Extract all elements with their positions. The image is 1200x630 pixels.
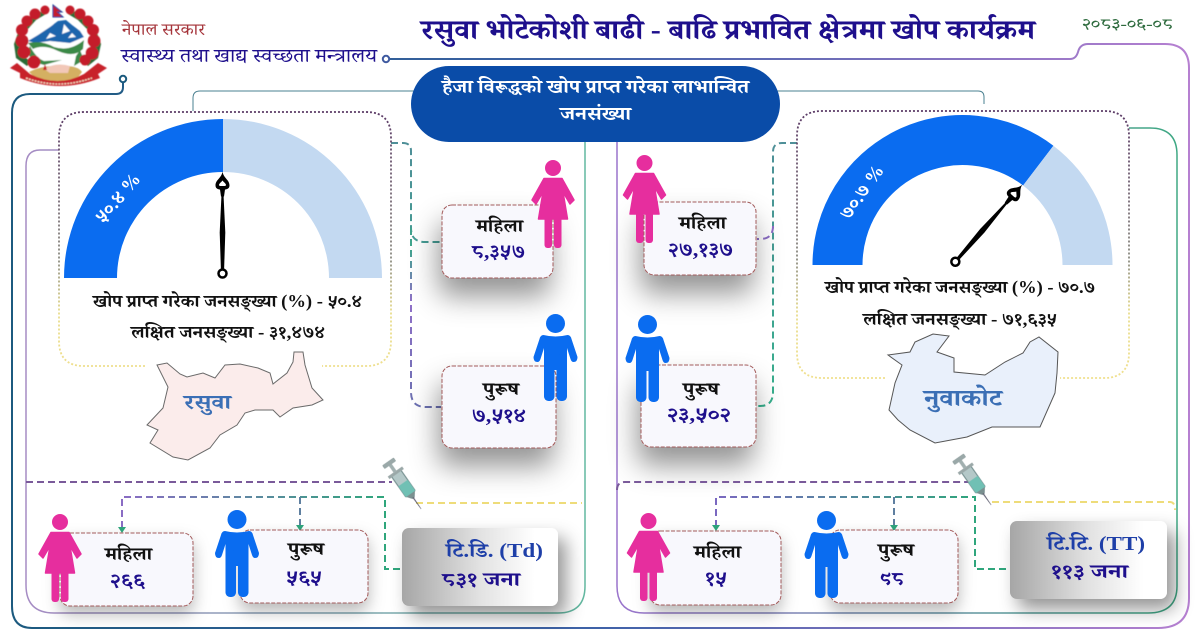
heading pill [411,66,780,142]
card: Rasuwa female: महिला [474,216,524,236]
card: Td male: पुरूष [286,539,325,561]
map: Rasuwa [147,352,323,460]
icon: female [532,160,574,248]
date: २०८३-०६-०८ [1082,16,1173,33]
card: TT male: ९८ [880,568,904,590]
icon: male [626,315,670,402]
divider: Rasuwa vaccine dashes [26,482,582,569]
card: Nuwakot male: पुरूष [681,379,720,401]
icon: female [39,514,81,602]
card: TT male [804,511,958,603]
connector: right gauge to cards [757,143,797,406]
card: Td total: टि.डि. (Td) [444,538,543,562]
card: Rasuwa male: पुरूष [481,379,520,401]
connector: left gauge to cards [391,143,441,407]
card: Nuwakot female: २७,१३७ [668,239,733,261]
panel: Nuwakot gauge [797,111,1129,378]
divider: Nuwakot vaccine dashes [617,482,1175,569]
title: रसुवा भोटेकोशी बाढी - बाढि प्रभावित क्षेत्रमा खोप कार्यक्रम [419,13,1038,48]
card: Rasuwa female [442,160,574,278]
card: Td male [215,510,368,603]
card: TT total: ११३ जना [1051,561,1130,583]
map: Nuwakot [888,334,1058,443]
card: TT male: पुरूष [876,540,915,562]
icon: syringe Nuwakot [951,452,998,510]
gauge caption: target: लक्षित जनसङ्ख्या - ७१,६३५ [861,309,1057,331]
card: Nuwakot female: महिला [677,213,727,233]
card: TT female: १५ [705,568,727,590]
map: Nuwakot: नुवाकोट [922,384,1005,413]
card: Nuwakot male: २३,५०२ [667,404,731,426]
inner frame right [617,128,1177,613]
card: TT female [628,513,781,605]
card: Td male: ५६५ [286,567,322,589]
card: Rasuwa male: ७,५१४ [472,405,526,427]
card: Td female [39,514,193,606]
icon: female [628,513,670,601]
emblem of Nepal [10,5,107,86]
header: government name: नेपाल सरकार [121,19,207,39]
icon: male [215,510,259,597]
gauge: Rasuwa [64,119,382,278]
heading pill: जनसंख्या [558,104,633,125]
icon: syringe Rasuwa [381,456,428,514]
icon: female [624,155,666,243]
card: Nuwakot female [624,155,756,275]
inner frame left [26,142,585,613]
gauge: Nuwakot [812,115,1112,269]
card: Rasuwa female: ८,३५७ [471,241,525,263]
card: Td total: ८३१ जना [441,569,522,591]
card: TT total: टि.टि. (TT) [1045,531,1145,555]
card: Rasuwa male [442,314,578,448]
icon: male [534,314,578,401]
card: TT female: महिला [692,542,742,562]
card: Td total [402,528,558,606]
gauge caption: coverage: खोप प्राप्त गरेका जनसङ्ख्या (%) - ५०.४ [91,291,362,313]
top connector line [193,91,984,111]
gauge: Rasuwa: ५०.४ % [91,169,145,228]
icon: male [804,511,848,598]
gauge caption: target: लक्षित जनसङ्ख्या - ३१,४७४ [129,322,325,344]
card: Nuwakot male [626,315,756,447]
gauge caption: coverage: खोप प्राप्त गरेका जनसङ्ख्या (%) - ७०.७ [823,277,1095,299]
panel: Rasuwa gauge [59,112,391,366]
card: Td female: २६६ [110,570,145,592]
gauge: Nuwakot: ७०.७ % [836,161,889,224]
header: ministry name: स्वास्थ्य तथा खाद्य स्वच्छता मन्त्रालय [120,46,379,67]
card: Td female: महिला [103,544,153,564]
map: Rasuwa: रसुवा [182,390,233,415]
card: TT total [1010,521,1167,599]
heading pill: हैजा विरूद्धको खोप प्राप्त गरेका लाभान्वित [440,75,750,98]
